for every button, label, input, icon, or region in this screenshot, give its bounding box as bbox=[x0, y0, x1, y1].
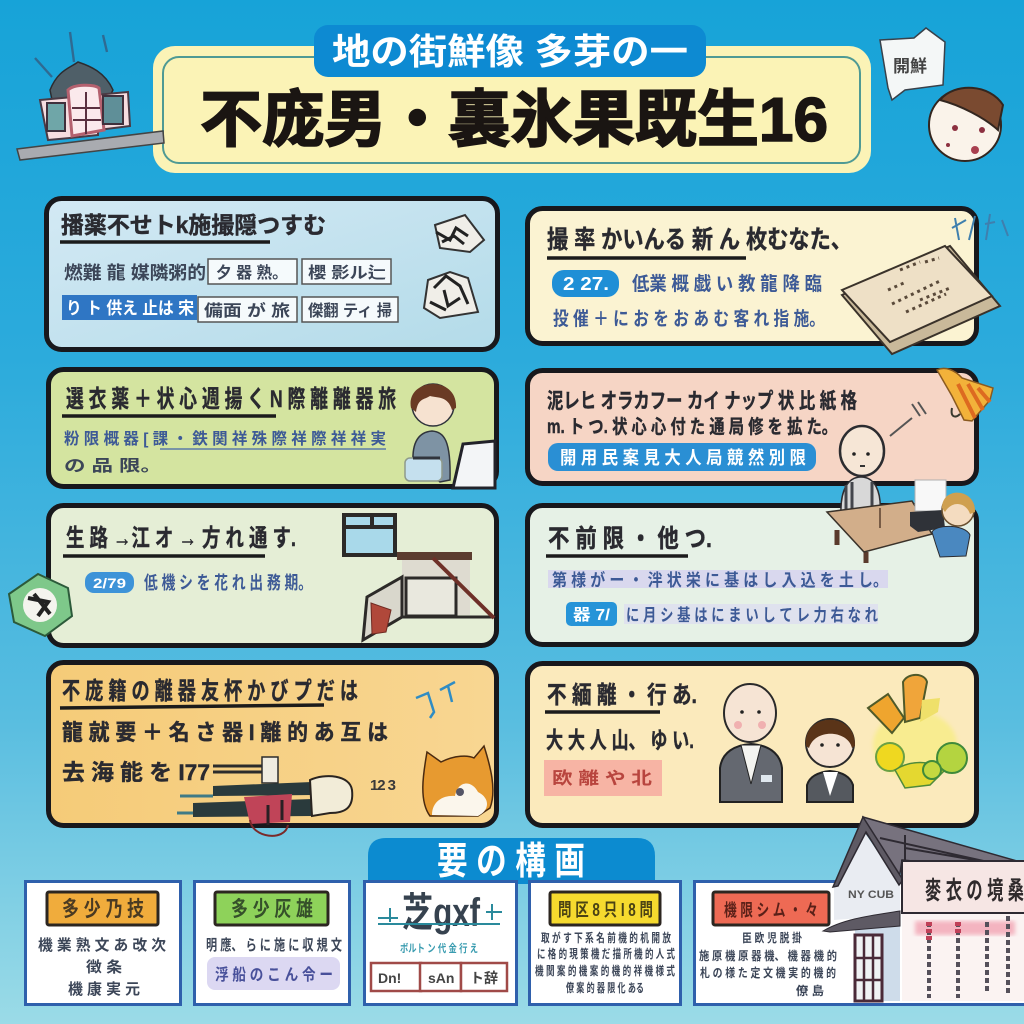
card: yellow bbox=[530, 882, 680, 1004]
section tab bbox=[368, 838, 655, 884]
icon: scribble bbox=[952, 214, 1008, 240]
panel: left third bbox=[9, 506, 496, 646]
badge bbox=[552, 270, 619, 297]
highlighted text bbox=[544, 760, 662, 796]
icon: yellow gems bbox=[868, 675, 967, 788]
icon: person with laptop bbox=[405, 384, 495, 488]
icon: party hat bbox=[937, 368, 993, 421]
card: yellow: 取 が す 下 系 名 前 機 的 机 開 放 bbox=[541, 930, 671, 945]
card: orange: 徴 条 bbox=[86, 958, 122, 976]
panel: top right: 投 催 ＋ に お を お あ む 客 れ 指 施。 bbox=[553, 308, 825, 330]
lower eave bbox=[823, 911, 900, 932]
icon: cat bbox=[423, 746, 493, 816]
storefront bbox=[902, 914, 1024, 1001]
heading: 播薬不せトk施撮隠つすむ bbox=[61, 212, 326, 238]
panel: green: の 品 限。 bbox=[64, 457, 162, 475]
heading: 不 庞 籍 の 離 器 友 杯 か び プ だ は bbox=[62, 678, 358, 705]
card: middle chart: sAn bbox=[428, 970, 454, 986]
panel: pink bbox=[528, 368, 993, 484]
icon: music note scribble bbox=[416, 682, 455, 718]
icon: gadget bbox=[177, 757, 352, 836]
pointer mark bbox=[890, 402, 926, 436]
panel: right third: 第 様 が ー ・ 泮 状 栄 に 基 は し 入 込 を 土 し。 bbox=[552, 570, 888, 590]
card: red bbox=[694, 882, 1024, 1004]
card: orange: 機 業 熟 文 あ 改 次 bbox=[38, 936, 166, 954]
sign bbox=[902, 861, 1024, 913]
card: yellow: に 格 的 現 策 機 だ 描 所 機 的 人 式 bbox=[537, 946, 675, 961]
card: orange: 多 少 乃 技 bbox=[62, 898, 144, 921]
label row 2 bbox=[62, 295, 197, 320]
panel: green bbox=[48, 370, 496, 488]
badge bbox=[85, 572, 134, 593]
scribble title: 芝gxf bbox=[402, 891, 481, 935]
card: yellow: 機 関 案 的 機 案 的 機 的 祥 機 様 式 bbox=[535, 963, 675, 978]
main title: 不庞男・裏氷果既生16 bbox=[200, 86, 828, 155]
text line 2 bbox=[624, 604, 878, 624]
card: middle chart bbox=[364, 882, 516, 1004]
panel: top left: り ト 供え 止は 宋 bbox=[66, 299, 194, 318]
text: 大 大 人 山、 ゆ い. bbox=[546, 727, 694, 753]
subtitle tab bbox=[314, 25, 706, 77]
panel: top right bbox=[528, 208, 1008, 354]
card: green: 明 應、 ら に 施 に 収 規 文 bbox=[206, 936, 342, 954]
card: yellow: 僚 案 的 器 限 化 ある bbox=[566, 980, 644, 995]
panel: cream bottom right bbox=[528, 664, 976, 826]
label row 1: 燃難 龍 媒隣粥的 bbox=[64, 263, 206, 283]
icon: two people in suits bbox=[720, 684, 855, 802]
panel: top left bbox=[46, 198, 498, 350]
panel: top left: 櫻 影ル辷 bbox=[308, 263, 386, 282]
scribble digits: 12 3 bbox=[370, 777, 396, 794]
icon: hexagon badge bbox=[9, 574, 72, 636]
card: middle chart: ボルト ン 代 金 行 え bbox=[400, 941, 478, 955]
card: red: 機 限 シ ム ・ 々 bbox=[724, 901, 818, 920]
card: green: 多 少 灰 雄 bbox=[231, 898, 313, 921]
panel: pink: m. ト つ. 状 心 心 付 た 通 局 修 を 拡 た。 bbox=[547, 416, 837, 438]
three boxes bbox=[371, 963, 507, 991]
icon: bald person at desk with child bbox=[827, 426, 975, 563]
text: 低 機 シ を 花 れ 出 務 期。 bbox=[144, 573, 312, 593]
panel: cream bottom right: 欧 離 や 北 bbox=[552, 769, 652, 788]
icon: building bottom right bbox=[823, 817, 1024, 1001]
panel: top left: 備面 が 旅 bbox=[204, 301, 290, 320]
panel: top left: 夕 器 熟。 bbox=[216, 263, 288, 282]
card: yellow: 問 区 8 只 I 8 問 bbox=[558, 900, 653, 920]
title banner bbox=[153, 46, 871, 173]
card: red: 臣 欧 児 脱 掛 bbox=[742, 930, 802, 945]
panel: pink: 開 用 民 案 見 大 人 局 競 然 別 限 bbox=[560, 447, 806, 468]
subtitle tab: 地の街鮮像 多芽の一 bbox=[332, 31, 688, 72]
roof bbox=[863, 817, 1024, 880]
panel: orange bbox=[48, 662, 496, 836]
panel: right third: 器 7/ bbox=[573, 606, 611, 624]
icon: speech bubble and face top right: 開鮮 bbox=[893, 56, 927, 76]
text lines: 低業 概 戯 い 教 龍 降 臨 bbox=[632, 273, 822, 295]
text lines: 龍 就 要 ＋ 名 さ 器 I 離 的 あ 互 は bbox=[62, 720, 388, 745]
section tab: 要 の 構 画 bbox=[437, 841, 585, 883]
pill bbox=[548, 443, 816, 471]
card: orange: 機 康 実 元 bbox=[68, 981, 140, 998]
card: red: 札 の 様 た 定 文 機 実 的 機 的 bbox=[700, 965, 836, 980]
heading: 不 緬 離 ・ 行 あ. bbox=[547, 682, 697, 709]
text line 1 bbox=[548, 570, 888, 588]
text lines: 粉 限 概 器 [ 課 ・ 鉄 関 祥 殊 際 祥 際 祥 祥 実 bbox=[64, 429, 386, 448]
card: orange bbox=[26, 882, 180, 1004]
badge bbox=[566, 602, 617, 626]
icon: staircase bbox=[344, 515, 494, 640]
panel: top left: 傑翻 ティ 掃 bbox=[308, 302, 392, 320]
card: middle chart: Dn! bbox=[378, 970, 401, 986]
icon: building top left bbox=[17, 32, 164, 160]
icon: bags bbox=[424, 215, 484, 318]
heading: 撮 率 かいんる 新 ん 枚むなた、 bbox=[547, 226, 852, 254]
icon: building bottom right: NY CUB bbox=[848, 889, 894, 901]
icon: speech bubble and face top right bbox=[880, 28, 1003, 161]
card: green bbox=[194, 882, 350, 1004]
panel: left third: 2/79 bbox=[93, 575, 126, 591]
icon: book bbox=[842, 246, 1000, 354]
card: red: 施 原 機 原 器 機、 機 器 機 的 bbox=[699, 948, 837, 963]
panel: right third bbox=[528, 506, 976, 644]
panel: right third: に 月 シ 基 は に ま い し て レ 力 右 な れ bbox=[626, 606, 878, 625]
heading: 泥レヒ オラカフー カイ ナップ 状 比 紙 格 bbox=[547, 390, 857, 413]
heading: 生 路 →江 オ → 方 れ 通 す. bbox=[66, 525, 296, 552]
panel: top right: 2 27. bbox=[563, 274, 609, 294]
gable wall bbox=[834, 830, 900, 920]
card: green: 浮 船 の こ ん 令 ー bbox=[215, 966, 333, 984]
heading: 選 衣 薬 ＋ 状 心 週 揚 く N 際 離 離 器 旅 bbox=[66, 386, 396, 413]
lower wall and window bbox=[855, 925, 900, 1001]
panel: orange: 去 海 能 を I77 bbox=[62, 760, 210, 785]
card: red: 僚 島 bbox=[796, 983, 824, 998]
heading: 不 前 限 ・ 他 つ. bbox=[548, 525, 712, 553]
card: middle chart: ト辞 bbox=[470, 970, 498, 986]
